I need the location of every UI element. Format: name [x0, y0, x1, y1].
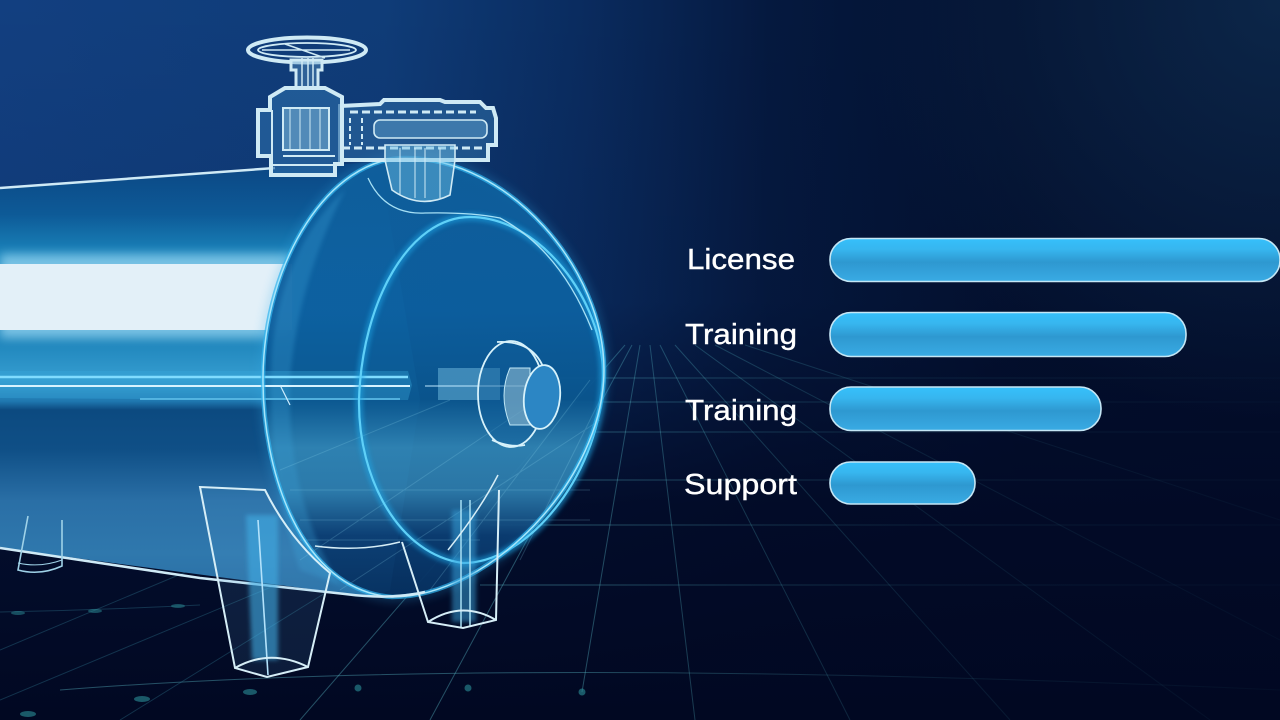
inner shaft light lines: [0, 368, 560, 405]
end cap outer glow: [263, 158, 604, 597]
glowing light band: [0, 254, 292, 338]
horizontal bar chart: [684, 238, 1280, 504]
right support leg: [315, 475, 499, 628]
outer ring: [263, 158, 604, 597]
tank end cap: [263, 158, 604, 597]
valve neck: [385, 145, 455, 201]
bar: Training second: Training: [685, 395, 797, 427]
grid node dots: [11, 604, 586, 717]
gearbox housing: [340, 100, 496, 160]
actuator block: [258, 88, 342, 175]
tank outline: [0, 168, 425, 597]
bar: Training second: [685, 387, 1101, 430]
valve stem: [291, 58, 322, 88]
tank cylinder body: [0, 162, 420, 597]
left support leg: [200, 487, 330, 677]
bar: Support: Support: [684, 469, 797, 501]
bar: Training: Training: [685, 319, 797, 351]
handwheel: [248, 38, 366, 62]
bar: License: [687, 238, 1280, 282]
perspective floor grid: [0, 345, 1280, 720]
bar: License: License: [687, 244, 795, 276]
valve assembly: [248, 38, 496, 201]
floor lines seen through cap: [280, 380, 600, 590]
inner ring: [359, 217, 603, 563]
hub on end cap: [478, 341, 563, 447]
bar: Training: [685, 312, 1186, 356]
end cap fill: [263, 158, 604, 597]
end cap left lit edge: [271, 190, 345, 585]
bar: Support: [684, 462, 975, 504]
far small leg: [18, 516, 62, 572]
